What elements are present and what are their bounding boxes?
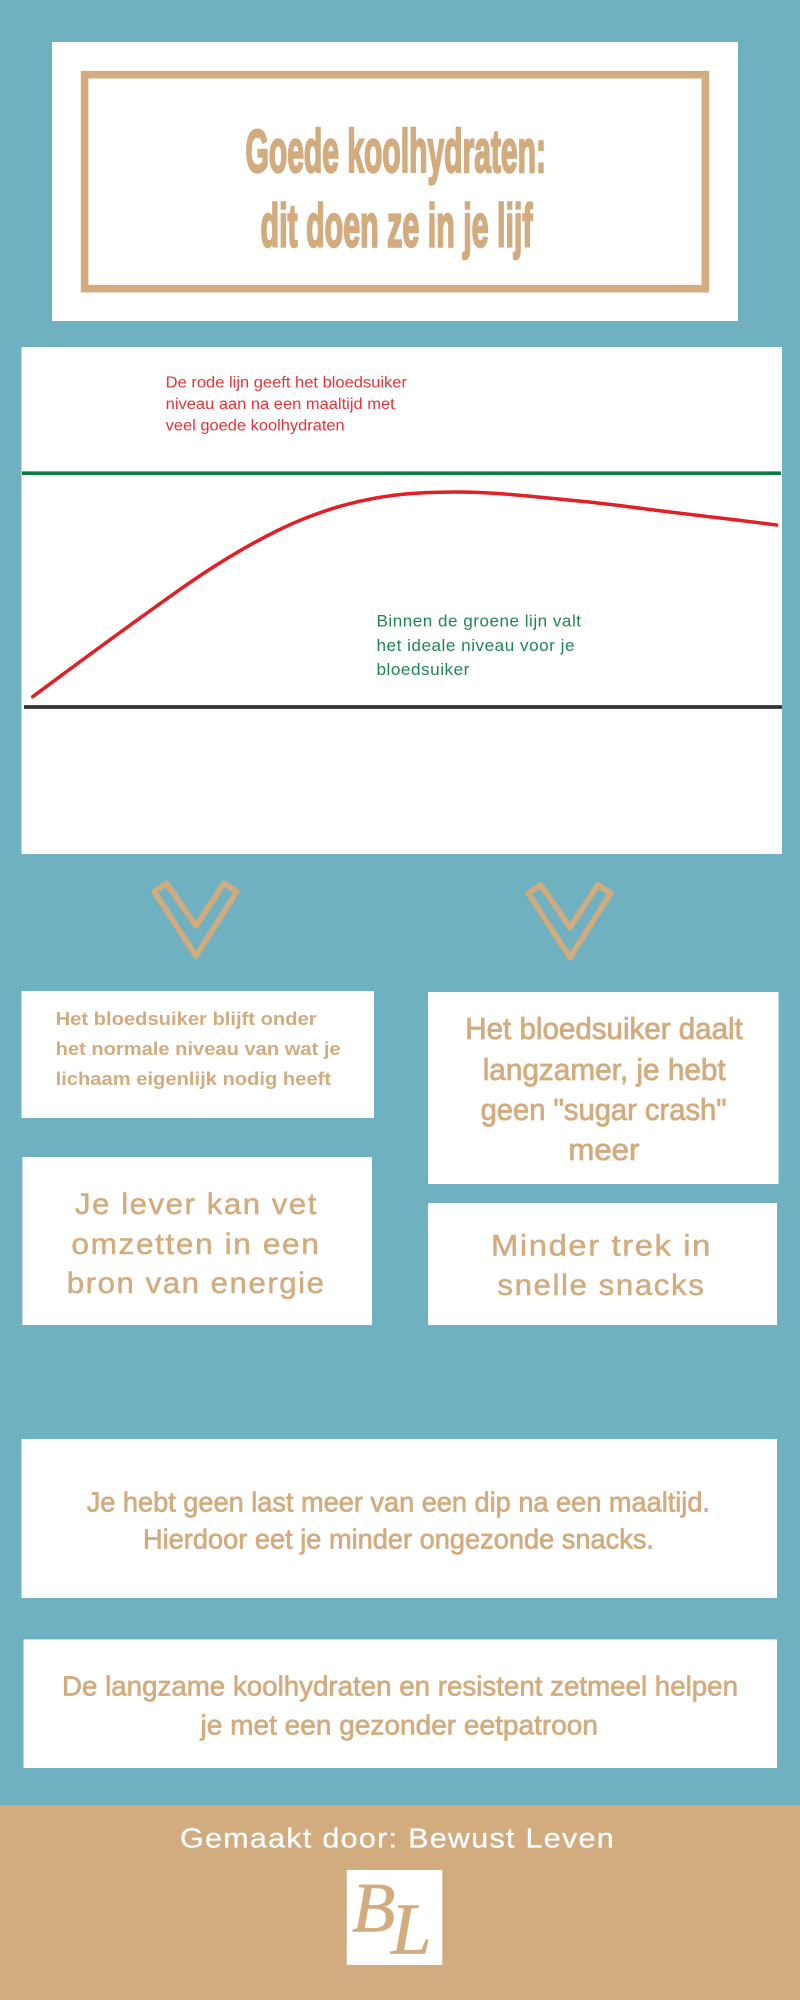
green line explanation: het ideale niveau voor je	[376, 636, 575, 655]
black lower limit line	[24, 705, 782, 709]
text: bron van energie	[67, 1267, 326, 1300]
panel: no dip after a meal	[22, 1439, 777, 1598]
red line explanation: veel goede koolhydraten	[166, 418, 345, 435]
panel: liver converts fat	[22, 1157, 372, 1325]
text: omzetten in een	[71, 1228, 320, 1261]
green line explanation: bloedsuiker	[376, 660, 470, 679]
text: Hierdoor eet je minder ongezonde snacks.	[143, 1523, 654, 1554]
header frame	[85, 75, 705, 289]
panel: blood sugar stays below normal	[22, 991, 374, 1118]
text: je met een gezonder eetpatroon	[199, 1710, 598, 1740]
logo: BL monogram: L	[390, 1888, 432, 1969]
logo: BL monogram: B	[352, 1870, 395, 1948]
text	[491, 1230, 712, 1302]
red line explanation: De rode lijn geeft het bloedsuiker	[166, 374, 407, 391]
text	[67, 1188, 326, 1300]
text: lichaam eigenlijk nodig heeft	[56, 1068, 331, 1089]
red blood sugar curve	[33, 492, 777, 697]
title: dit doen ze in je lijf	[260, 192, 533, 260]
red line explanation: niveau aan na een maaltijd met	[166, 396, 395, 413]
logo: BL monogram	[347, 1870, 442, 1969]
text: het normale niveau van wat je	[56, 1038, 341, 1059]
text: Je hebt geen last meer van een dip na een maaltijd.	[87, 1486, 710, 1517]
panel: blood sugar chart	[22, 347, 782, 854]
icon: right chevron arrow	[528, 885, 611, 958]
green line explanation	[376, 612, 582, 679]
text	[56, 1008, 341, 1089]
title	[246, 118, 546, 260]
text: meer	[568, 1132, 639, 1167]
text	[87, 1486, 710, 1554]
text: De langzame koolhydraten en resistent zetmeel helpen	[62, 1671, 738, 1702]
green upper limit line	[22, 471, 781, 475]
text: Het bloedsuiker daalt	[465, 1011, 743, 1046]
panel: slow carbohydrates and resistant starch	[24, 1639, 777, 1768]
text: Je lever kan vet	[75, 1188, 318, 1221]
text: Minder trek in	[491, 1230, 712, 1263]
text: geen "sugar crash"	[481, 1092, 727, 1127]
panel: fewer snack cravings	[428, 1203, 777, 1325]
green line explanation: Binnen de groene lijn valt	[376, 612, 582, 631]
text: langzamer, je hebt	[483, 1052, 726, 1087]
text	[62, 1671, 738, 1740]
footer credit: Gemaakt door: Bewust Leven	[180, 1822, 615, 1853]
text: snelle snacks	[497, 1269, 705, 1302]
footer	[0, 1805, 800, 2000]
header panel	[52, 42, 738, 321]
text: Het bloedsuiker blijft onder	[56, 1008, 317, 1029]
icon: left chevron arrow	[154, 883, 237, 956]
panel: blood sugar falls slower	[428, 992, 778, 1184]
text	[465, 1011, 743, 1167]
red line explanation	[166, 374, 407, 435]
